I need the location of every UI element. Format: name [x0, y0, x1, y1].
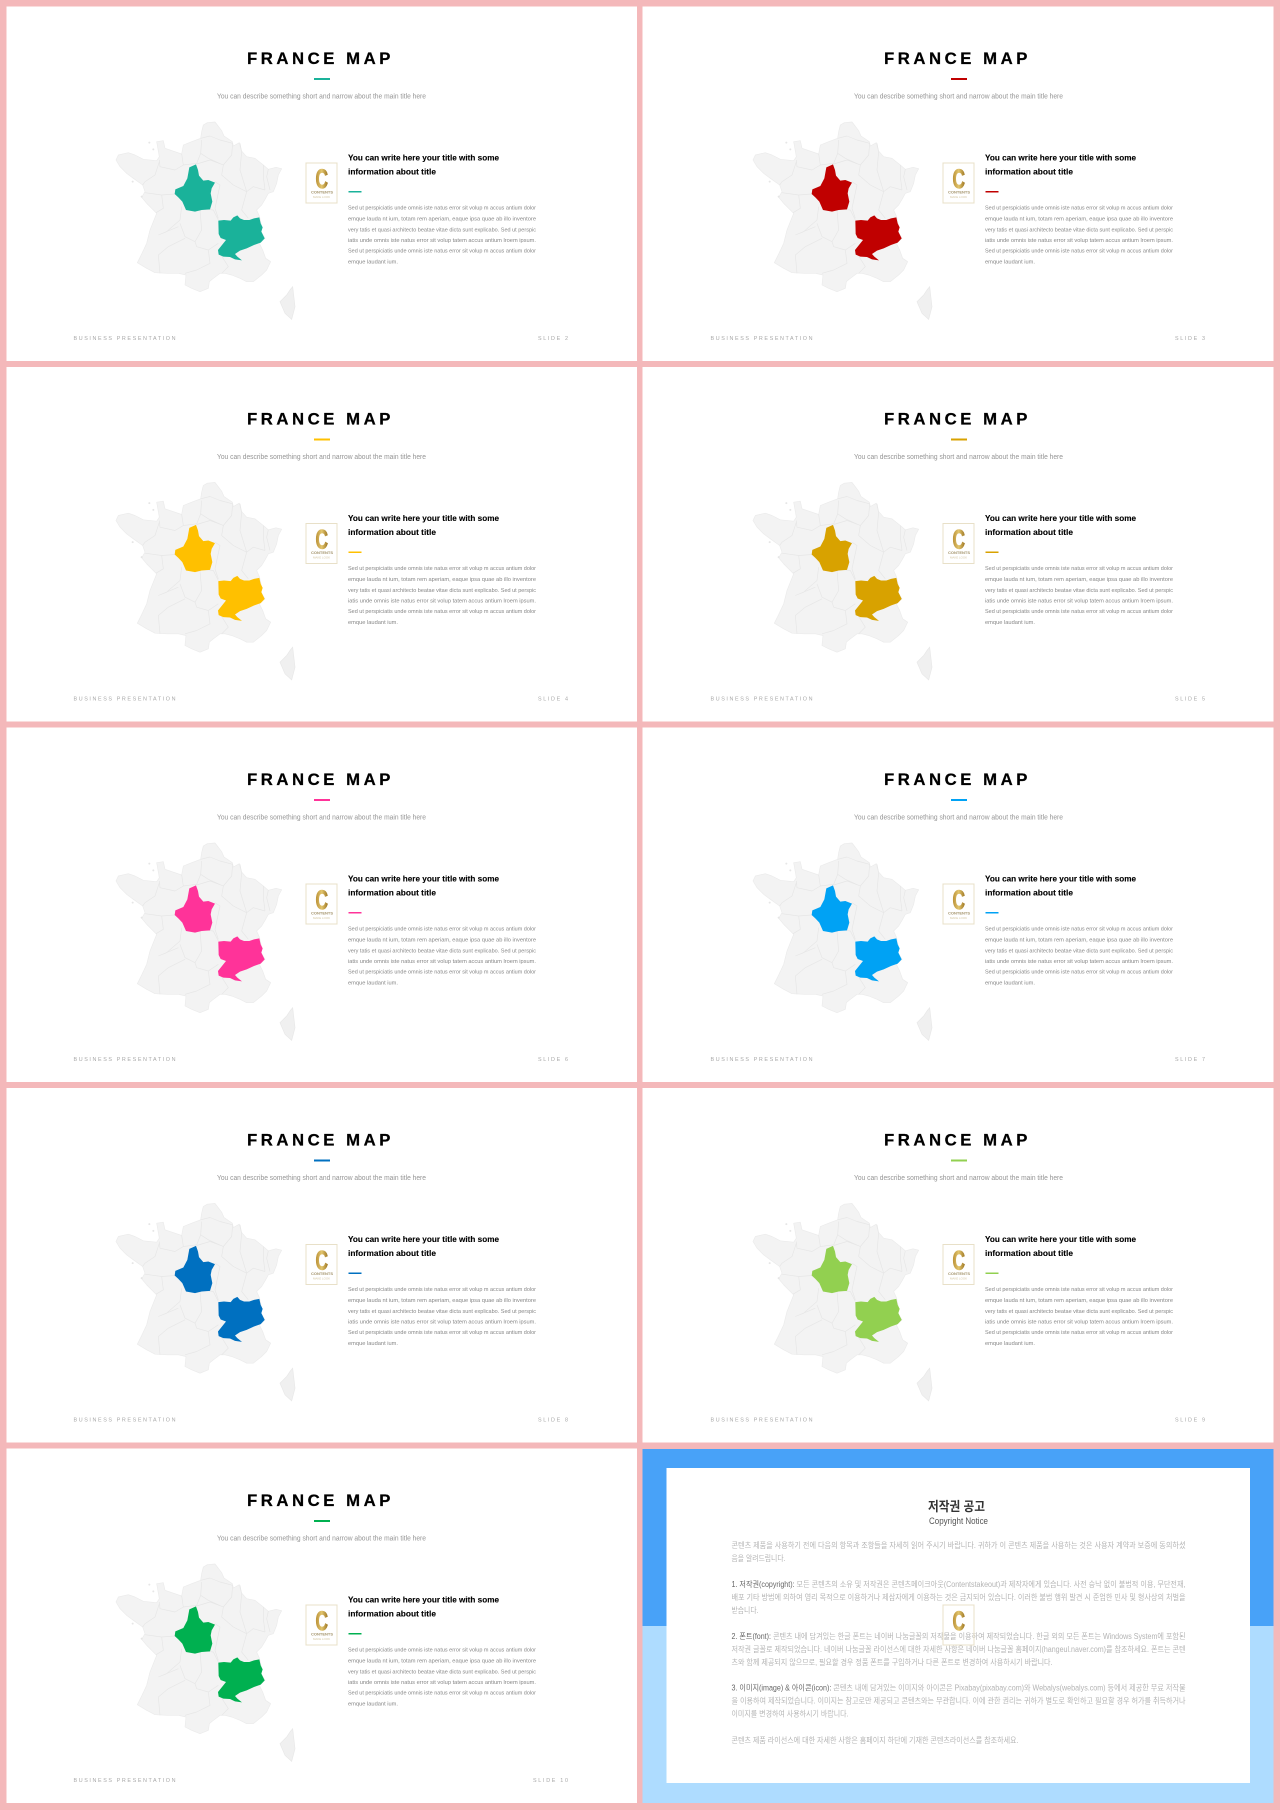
footer right: SLIDE 7: [1175, 1057, 1205, 1063]
body paragraph: Sed ut perspiciatis unde omnis iste natus error sit volup m accus antium dolor: [348, 926, 536, 932]
body paragraph: [348, 566, 536, 626]
body paragraph: emque laudant ium.: [985, 259, 1035, 265]
title underline: [951, 438, 967, 440]
body paragraph: emque laudant ium.: [985, 620, 1035, 626]
intro text: [732, 1540, 1186, 1563]
body paragraph: emque laudant ium.: [348, 1701, 398, 1707]
body paragraph: Sed ut perspiciatis unde omnis iste natus error sit volup m accus antium dolor: [985, 1287, 1173, 1293]
footer left: BUSINESS PRESENTATION: [74, 696, 176, 702]
body paragraph: [348, 926, 536, 986]
title underline: [951, 78, 967, 80]
text heading: [348, 1594, 499, 1618]
icon: contents logo: C: [316, 1246, 328, 1276]
title underline: [314, 799, 330, 801]
body paragraph: Sed ut perspiciatis unde omnis iste natus error sit volup m accus antium dolor: [348, 1648, 536, 1654]
icon: contents logo: C: [952, 885, 965, 915]
body paragraph: very tatis et quasi architecto beatae vitae dicta sunt explicabo. Sed ut perspic: [985, 588, 1173, 594]
title underline: [314, 1160, 330, 1162]
panel: slide 4 yellow: [6, 367, 637, 722]
panel: slide 5 dark gold: [642, 367, 1274, 722]
text heading: [985, 1234, 1136, 1258]
body paragraph: emque lauda nt ium, totam rem aperiam, eaque ipsa quae ab illo inventore: [985, 938, 1173, 944]
text heading: information about title: [985, 527, 1073, 537]
body paragraph: [348, 1648, 536, 1707]
intro text: 음을 알려드립니다.: [732, 1553, 786, 1563]
body paragraph: emque laudant ium.: [348, 259, 398, 265]
title: FRANCE MAP: [247, 49, 394, 68]
body paragraph: very tatis et quasi architecto beatae vitae dicta sunt explicabo. Sed ut perspic: [348, 1669, 536, 1675]
body paragraph: [348, 206, 536, 265]
body paragraph: Sed ut perspiciatis unde omnis iste natus error sit volup m accus antium dolor: [348, 1690, 536, 1696]
clause 1: copyright: 배포 기타 방법에 의하여 영리 목적으로 이용하거나 제삼자에게 이용하는 것은 금지되어 있습니다. 이러한 불법 행위 발견 시 준엄한 민사 및 형사상의 처벌을: [732, 1592, 1186, 1602]
text heading: information about title: [348, 1608, 436, 1618]
body paragraph: emque laudant ium.: [985, 980, 1035, 986]
clause 3: image and icon: 을 이용하여 제작되었습니다. 이미지는 참고로만 제공되고 콘텐츠와는 무관합니다. 이에 관한 권리는 귀하가 별도로 확인하고 필요할 경우 허가를 취득하거나: [732, 1696, 1186, 1706]
body paragraph: Sed ut perspiciatis unde omnis iste natus error sit volup m accus antium dolor: [985, 609, 1173, 615]
body paragraph: [348, 1287, 536, 1347]
backdrop: blue top: [642, 1449, 1274, 1626]
text heading: [985, 513, 1136, 537]
text heading: You can write here your title with some: [348, 1234, 499, 1244]
icon: contents logo: C: [952, 524, 965, 554]
icon: contents logo: MAKE LOOK: [950, 195, 967, 199]
text heading: You can write here your title with some: [348, 874, 499, 884]
body paragraph: emque lauda nt ium, totam rem aperiam, eaque ipsa quae ab illo inventore: [348, 217, 536, 223]
panel: copyright notice: [642, 1449, 1274, 1803]
subtitle: You can describe something short and narrow about the main title here: [854, 814, 1063, 822]
panel: slide 2 teal: [6, 6, 637, 361]
closing text: 콘텐츠 제품 라이선스에 대한 자세한 사항은 홈페이지 하단에 기재한 콘텐츠라이선스를 참조하세요.: [732, 1735, 1018, 1745]
icon: contents logo: [306, 1244, 337, 1284]
heading rule: [348, 552, 362, 553]
body paragraph: iatis unde omnis iste natus error sit volup tatem accus antium lroem ipsum.: [985, 238, 1173, 244]
text heading: [348, 874, 499, 898]
text heading: information about title: [985, 1248, 1073, 1258]
text heading: information about title: [348, 166, 436, 176]
title: FRANCE MAP: [247, 410, 394, 428]
text heading: You can write here your title with some: [348, 152, 499, 162]
icon: contents logo: MAKE LOOK: [313, 195, 330, 199]
body paragraph: Sed ut perspiciatis unde omnis iste natus error sit volup m accus antium dolor: [985, 206, 1173, 212]
body paragraph: Sed ut perspiciatis unde omnis iste natus error sit volup m accus antium dolor: [985, 248, 1173, 254]
icon: contents logo: [943, 1605, 974, 1645]
footer left: BUSINESS PRESENTATION: [710, 1057, 813, 1063]
heading rule: [348, 912, 362, 914]
body paragraph: very tatis et quasi architecto beatae vitae dicta sunt explicabo. Sed ut perspic: [985, 948, 1173, 954]
panel: slide 10 green: [6, 1448, 637, 1803]
footer left: BUSINESS PRESENTATION: [710, 1418, 813, 1424]
icon: contents logo: [943, 163, 974, 203]
panel: slide 9 light green: [642, 1088, 1274, 1442]
panel: slide 8 dark blue: [6, 1088, 637, 1442]
subtitle: You can describe something short and narrow about the main title here: [217, 454, 426, 461]
map of France: [116, 482, 295, 680]
text heading: [348, 152, 499, 176]
footer right: SLIDE 9: [1175, 1418, 1205, 1424]
heading rule: [986, 552, 998, 553]
icon: contents logo: C: [316, 1606, 328, 1636]
body paragraph: Sed ut perspiciatis unde omnis iste natus error sit volup m accus antium dolor: [985, 926, 1173, 932]
footer right: SLIDE 8: [538, 1418, 568, 1424]
clause 1: copyright: [732, 1579, 1186, 1615]
clause 2: font: 저작권 글꼴로 제작되었습니다. 네이버 나눔글꼴 라이선스에 대한 자세한 사항은 네이버 나눔글꼴 홈페이지(hangeul.naver.com)를 참조하세요. 폰트는 콘텐: [732, 1644, 1186, 1654]
title: FRANCE MAP: [884, 49, 1031, 68]
title: FRANCE MAP: [247, 770, 394, 789]
heading rule: [348, 1272, 362, 1274]
subtitle: You can describe something short and narrow about the main title here: [217, 1536, 426, 1542]
clause 2: font: 2. 폰트(font): 콘텐츠 내에 담겨있는 한글 폰트는 네이버 나눔글꼴의 저작물을 이용하여 제작되었습니다. 한글 외의 모든 폰트는 Windows System에 포함된: [732, 1631, 1186, 1641]
heading rule: [348, 1633, 362, 1634]
icon: contents logo: CONTENTS: [948, 550, 970, 555]
footer right: SLIDE 4: [538, 696, 568, 702]
icon: contents logo: C: [316, 524, 328, 554]
icon: contents logo: CONTENTS: [311, 190, 333, 194]
panel: slide 6 pink: [6, 728, 637, 1082]
body paragraph: very tatis et quasi architecto beatae vitae dicta sunt explicabo. Sed ut perspic: [348, 948, 536, 954]
icon: contents logo: CONTENTS: [311, 1632, 333, 1636]
body paragraph: Sed ut perspiciatis unde omnis iste natus error sit volup m accus antium dolor: [348, 206, 536, 212]
clause 3: image and icon: 3. 이미지(image) & 아이콘(icon): 콘텐츠 내에 담겨있는 이미지와 아이콘은 Pixabay(pixabay.com)와 Webalys(webalys.com) 등에서 제공한 무료 저작물: [732, 1682, 1186, 1692]
subtitle: You can describe something short and narrow about the main title here: [217, 1175, 426, 1182]
body paragraph: Sed ut perspiciatis unde omnis iste natus error sit volup m accus antium dolor: [985, 1330, 1173, 1336]
text heading: information about title: [348, 527, 436, 537]
subtitle: You can describe something short and narrow about the main title here: [854, 1175, 1063, 1182]
backdrop: light blue bottom: [642, 1626, 1274, 1803]
footer left: BUSINESS PRESENTATION: [74, 1418, 176, 1424]
subtitle: You can describe something short and narrow about the main title here: [854, 454, 1063, 461]
map of France: [753, 1203, 932, 1401]
text heading: [348, 513, 499, 537]
map of France: [116, 122, 295, 319]
text heading: [985, 152, 1136, 176]
text heading: information about title: [348, 1248, 436, 1258]
icon: contents logo: CONTENTS: [311, 550, 333, 555]
icon: contents logo: MAKE LOOK: [950, 556, 967, 560]
icon: contents logo: MAKE LOOK: [313, 556, 330, 560]
body paragraph: iatis unde omnis iste natus error sit volup tatem accus antium lroem ipsum.: [348, 1319, 536, 1325]
body paragraph: very tatis et quasi architecto beatae vitae dicta sunt explicabo. Sed ut perspic: [348, 588, 536, 594]
map of France: [116, 1203, 295, 1401]
title underline: [951, 799, 967, 801]
panel: slide 7 sky blue: [642, 728, 1274, 1082]
body paragraph: emque lauda nt ium, totam rem aperiam, eaque ipsa quae ab illo inventore: [348, 577, 536, 583]
notice subtitle: Copyright Notice: [929, 1516, 988, 1526]
footer right: SLIDE 5: [1175, 696, 1205, 702]
icon: contents logo: [943, 1244, 974, 1284]
body paragraph: iatis unde omnis iste natus error sit volup tatem accus antium lroem ipsum.: [985, 598, 1173, 604]
icon: contents logo: [306, 884, 337, 924]
body paragraph: emque lauda nt ium, totam rem aperiam, eaque ipsa quae ab illo inventore: [985, 217, 1173, 223]
text heading: You can write here your title with some: [348, 513, 499, 523]
text heading: You can write here your title with some: [985, 513, 1136, 523]
text heading: [348, 1234, 499, 1258]
icon: contents logo: MAKE LOOK: [313, 916, 330, 920]
title: FRANCE MAP: [884, 410, 1031, 428]
subtitle: You can describe something short and narrow about the main title here: [854, 94, 1063, 100]
text heading: You can write here your title with some: [985, 1234, 1136, 1244]
body paragraph: emque laudant ium.: [348, 980, 398, 986]
heading rule: [986, 912, 998, 914]
body paragraph: Sed ut perspiciatis unde omnis iste natus error sit volup m accus antium dolor: [348, 969, 536, 975]
text heading: information about title: [985, 888, 1073, 898]
body paragraph: Sed ut perspiciatis unde omnis iste natus error sit volup m accus antium dolor: [348, 1330, 536, 1336]
intro text: 콘텐츠 제품을 사용하기 전에 다음의 항목과 조항들을 자세히 읽어 주시기 바랍니다. 귀하가 이 콘텐츠 제품을 사용하는 것은 사용자 계약과 보증에 동의하셨: [732, 1540, 1186, 1550]
body paragraph: [985, 926, 1173, 986]
body paragraph: emque lauda nt ium, totam rem aperiam, eaque ipsa quae ab illo inventore: [985, 577, 1173, 583]
text heading: [985, 874, 1136, 898]
body paragraph: iatis unde omnis iste natus error sit volup tatem accus antium lroem ipsum.: [348, 1680, 536, 1686]
clause 3: image and icon: 이미지를 변경하여 사용하시기 바랍니다.: [732, 1708, 848, 1718]
body paragraph: emque laudant ium.: [348, 620, 398, 626]
text heading: You can write here your title with some: [348, 1594, 499, 1604]
clause 1: copyright: 1. 저작권(copyright): 모든 콘텐츠의 소유 및 저작권은 콘텐츠메이크아웃(Contentstakeout)과 제작자에게 있습니다. 사전 승낙 없이 불법적 이용, 무단전재,: [732, 1579, 1186, 1589]
icon: contents logo: [306, 1605, 337, 1645]
footer right: SLIDE 6: [538, 1057, 568, 1063]
icon: contents logo: C: [952, 164, 965, 194]
body paragraph: Sed ut perspiciatis unde omnis iste natus error sit volup m accus antium dolor: [348, 609, 536, 615]
icon: contents logo: CONTENTS: [948, 190, 970, 194]
icon: contents logo: CONTENTS: [311, 910, 333, 916]
title: FRANCE MAP: [884, 1130, 1031, 1150]
icon: contents logo: MAKE LOOK: [313, 1637, 330, 1641]
body paragraph: Sed ut perspiciatis unde omnis iste natus error sit volup m accus antium dolor: [348, 566, 536, 572]
body paragraph: very tatis et quasi architecto beatae vitae dicta sunt explicabo. Sed ut perspic: [348, 1309, 536, 1315]
footer left: BUSINESS PRESENTATION: [710, 696, 813, 702]
icon: contents logo: C: [952, 1606, 965, 1636]
title underline: [314, 438, 330, 440]
footer left: BUSINESS PRESENTATION: [74, 336, 176, 342]
icon: contents logo: C: [316, 164, 328, 194]
icon: contents logo: CONTENTS: [948, 910, 970, 916]
panel: slide 3 red: [642, 6, 1274, 361]
body paragraph: [985, 206, 1173, 265]
heading rule: [348, 191, 362, 192]
icon: contents logo: CONTENTS: [948, 1271, 970, 1276]
icon: contents logo: CONTENTS: [311, 1271, 333, 1276]
icon: contents logo: [306, 163, 337, 203]
body paragraph: very tatis et quasi architecto beatae vitae dicta sunt explicabo. Sed ut perspic: [985, 227, 1173, 233]
body paragraph: emque lauda nt ium, totam rem aperiam, eaque ipsa quae ab illo inventore: [348, 1298, 536, 1304]
footer right: SLIDE 3: [1175, 336, 1205, 342]
footer left: BUSINESS PRESENTATION: [74, 1057, 176, 1063]
body paragraph: very tatis et quasi architecto beatae vitae dicta sunt explicabo. Sed ut perspic: [348, 227, 536, 233]
clause 1: copyright: 받습니다.: [732, 1605, 758, 1615]
title underline: [951, 1160, 967, 1162]
heading rule: [986, 1272, 998, 1274]
footer right: SLIDE 2: [538, 336, 568, 342]
notice title: 저작권 공고: [928, 1499, 985, 1514]
clause 3: image and icon: [732, 1682, 1186, 1718]
body paragraph: emque laudant ium.: [985, 1341, 1035, 1347]
body paragraph: Sed ut perspiciatis unde omnis iste natus error sit volup m accus antium dolor: [985, 566, 1173, 572]
body paragraph: [985, 566, 1173, 626]
subtitle: You can describe something short and narrow about the main title here: [217, 814, 426, 822]
title underline: [314, 1520, 330, 1522]
map of France: [116, 843, 295, 1040]
icon: contents logo: MAKE LOOK: [950, 1276, 967, 1280]
body paragraph: emque lauda nt ium, totam rem aperiam, eaque ipsa quae ab illo inventore: [348, 938, 536, 944]
body paragraph: iatis unde omnis iste natus error sit volup tatem accus antium lroem ipsum.: [348, 598, 536, 604]
icon: contents logo: MAKE LOOK: [950, 916, 967, 920]
icon: contents logo: [943, 524, 974, 564]
icon: contents logo: C: [952, 1246, 965, 1276]
clause 2: font: 츠와 함께 제공되지 않으므로, 필요할 경우 정품 폰트를 구입하거나 다른 폰트로 변경하여 사용하시기 바랍니다.: [732, 1657, 1052, 1667]
footer left: BUSINESS PRESENTATION: [74, 1778, 176, 1784]
text heading: You can write here your title with some: [985, 152, 1136, 162]
icon: contents logo: [306, 524, 337, 564]
body paragraph: Sed ut perspiciatis unde omnis iste natus error sit volup m accus antium dolor: [985, 969, 1173, 975]
heading rule: [986, 191, 998, 192]
body paragraph: Sed ut perspiciatis unde omnis iste natus error sit volup m accus antium dolor: [348, 1287, 536, 1293]
body paragraph: emque lauda nt ium, totam rem aperiam, eaque ipsa quae ab illo inventore: [348, 1659, 536, 1665]
body paragraph: iatis unde omnis iste natus error sit volup tatem accus antium lroem ipsum.: [985, 959, 1173, 965]
title underline: [314, 78, 330, 80]
body paragraph: iatis unde omnis iste natus error sit volup tatem accus antium lroem ipsum.: [348, 959, 536, 965]
title: FRANCE MAP: [247, 1130, 394, 1150]
subtitle: You can describe something short and narrow about the main title here: [217, 94, 426, 100]
clause 2: font: [732, 1631, 1186, 1667]
text heading: information about title: [348, 888, 436, 898]
footer left: BUSINESS PRESENTATION: [710, 336, 813, 342]
map of France: [753, 843, 932, 1040]
title: FRANCE MAP: [884, 770, 1031, 789]
map of France: [116, 1564, 295, 1761]
text heading: You can write here your title with some: [985, 874, 1136, 884]
body paragraph: [985, 1287, 1173, 1347]
notice card: [666, 1468, 1250, 1783]
body paragraph: emque lauda nt ium, totam rem aperiam, eaque ipsa quae ab illo inventore: [985, 1298, 1173, 1304]
body paragraph: iatis unde omnis iste natus error sit volup tatem accus antium lroem ipsum.: [985, 1319, 1173, 1325]
body paragraph: very tatis et quasi architecto beatae vitae dicta sunt explicabo. Sed ut perspic: [985, 1309, 1173, 1315]
title: FRANCE MAP: [247, 1491, 394, 1510]
icon: contents logo: [943, 884, 974, 924]
map of France: [753, 122, 932, 319]
body paragraph: emque laudant ium.: [348, 1341, 398, 1347]
body paragraph: iatis unde omnis iste natus error sit volup tatem accus antium lroem ipsum.: [348, 238, 536, 244]
icon: contents logo: C: [316, 885, 328, 915]
body paragraph: Sed ut perspiciatis unde omnis iste natus error sit volup m accus antium dolor: [348, 248, 536, 254]
map of France: [753, 482, 932, 680]
icon: contents logo: MAKE LOOK: [313, 1276, 330, 1280]
footer right: SLIDE 10: [533, 1778, 568, 1784]
text heading: information about title: [985, 166, 1073, 176]
